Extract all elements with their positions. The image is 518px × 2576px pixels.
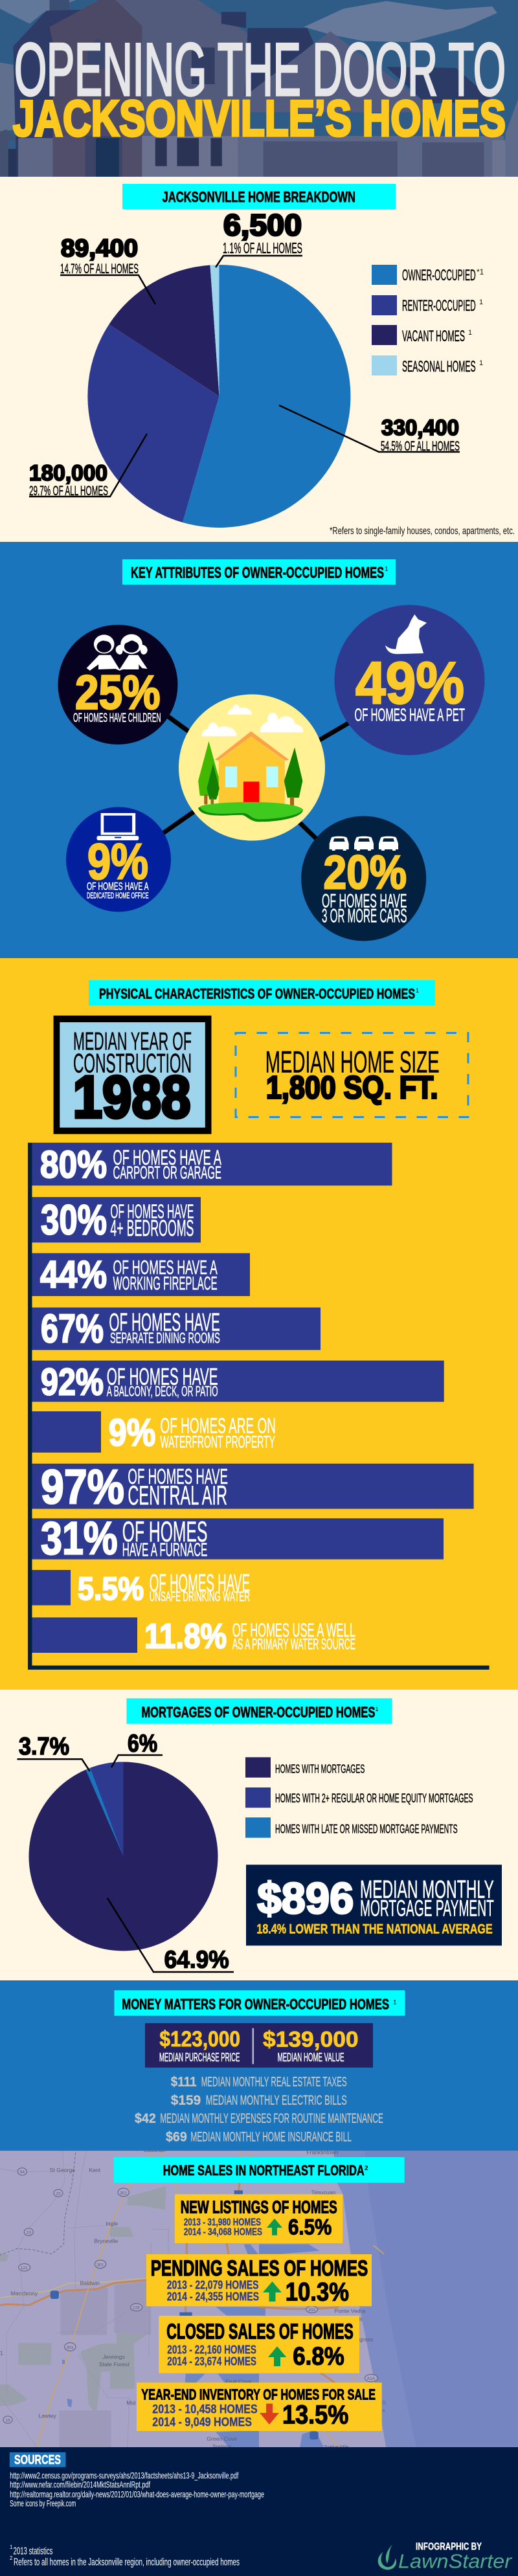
- label: 3.7%: 3.7%: [19, 1733, 69, 1760]
- bar chart: home features: [28, 1143, 490, 1670]
- list: monthly expenses: $69: [166, 2130, 187, 2145]
- label: 6,500 seasonal: 1.1% OF ALL HOMES: [223, 240, 302, 256]
- map background: 16: [5, 2418, 10, 2423]
- callout: median home size: [236, 1033, 468, 1117]
- stat: 20% cars: OF HOMES HAVE: [322, 890, 407, 912]
- bar: 9% waterfront: WATERFRONT PROPERTY: [160, 1432, 275, 1451]
- heading: money matters: MONEY MATTERS FOR OWNER-OCCUPIED HOMES: [122, 1995, 389, 2012]
- label: 6%: [111, 1730, 163, 1767]
- icon: three cars: [330, 836, 398, 851]
- heading: home sales in northeast Florida: [114, 2157, 405, 2183]
- arrow: down: [260, 2404, 279, 2425]
- bar: 30% four bedrooms: [32, 1196, 201, 1244]
- box: closed sales: 6.8%: [293, 2342, 344, 2370]
- map background: grass: [359, 2336, 374, 2343]
- panel: home sales map: [0, 2147, 518, 2450]
- box: pending sales: 10.3%: [286, 2278, 349, 2306]
- bar: 80% carport or garage: OF HOMES HAVE A: [113, 1146, 221, 1169]
- icon: LawnStarter logo: [378, 2544, 396, 2570]
- bar: 5.5% unsafe water: [32, 1570, 250, 1607]
- bar: 92% balcony: OF HOMES HAVE: [107, 1363, 218, 1390]
- legend: home types: 1: [479, 359, 483, 367]
- label: 64.9%: 64.9%: [164, 1946, 229, 1973]
- chart axes: [28, 1143, 490, 1670]
- bar: 44% fireplace: [32, 1253, 250, 1296]
- map background: 1: [0, 2350, 3, 2357]
- map background: 23: [56, 2191, 61, 2196]
- heading: physical characteristics: [89, 980, 435, 1005]
- pie chart: home breakdown: [87, 265, 350, 528]
- box: closed sales: 2013 - 22,160 HOMES: [167, 2344, 256, 2357]
- box: pending sales: 2013 - 22,079 HOMES: [167, 2279, 259, 2292]
- callout: $896 median monthly payment: $896: [257, 1874, 354, 1923]
- bar: 67% dining rooms: SEPARATE DINING ROOMS: [110, 1330, 220, 1347]
- map background: Mid: [126, 2399, 135, 2406]
- heading: home sales in northeast Florida: HOME SALES IN NORTHEAST FLORIDA: [163, 2162, 365, 2178]
- heading: Jacksonville home breakdown: JACKSONVILLE HOME BREAKDOWN: [162, 188, 355, 205]
- label: 180,000 renter-occupied: 180,000: [29, 461, 107, 486]
- panel: median purchase price and home value: MEDIAN HOME VALUE: [278, 2051, 344, 2064]
- credit: infographic by LawnStarter: [378, 2541, 513, 2573]
- map background: Macclenny: [11, 2290, 38, 2297]
- bar: 44% fireplace: OF HOMES HAVE A: [113, 1256, 218, 1279]
- arrow: up: [267, 2219, 282, 2235]
- bar: 44% fireplace: WORKING FIREPLACE: [113, 1273, 218, 1294]
- icon: two children: [87, 634, 148, 671]
- bar: 97% central air: [32, 1460, 474, 1514]
- bar: 31% furnace: [32, 1514, 444, 1565]
- footnotes: [10, 2544, 240, 2568]
- panel: median purchase price and home value: [145, 2023, 373, 2068]
- stat: 20% cars: 3 OR MORE CARS: [322, 905, 407, 926]
- bar: 11.8% well water: [32, 1617, 355, 1656]
- bar: 5.5% unsafe water: 5.5%: [78, 1571, 144, 1607]
- footnotes: 2013 statistics: [13, 2546, 53, 2557]
- stat: 20% cars: 20%: [324, 847, 407, 899]
- map background: 301: [96, 2263, 104, 2267]
- stat: 20% cars: [301, 816, 426, 941]
- map background: Callahan: [144, 2147, 166, 2153]
- header: house photo with title: [0, 0, 518, 177]
- map background: Timucuan: [311, 2189, 336, 2195]
- stat: 9% home office: DEDICATED HOME OFFICE: [87, 891, 149, 900]
- source links: [10, 2470, 264, 2509]
- bar: 11.8% well water: 11.8%: [144, 1617, 227, 1656]
- map background: 121: [21, 2266, 28, 2270]
- bar: 92% balcony: A BALCONY, DECK, OR PATIO: [107, 1383, 218, 1399]
- heading: home sales in northeast Florida: 2: [365, 2165, 368, 2172]
- heading: money matters: 1: [393, 1999, 397, 2006]
- bar: 31% furnace: OF HOMES: [122, 1516, 207, 1548]
- box: year-end inventory: 2014 - 9,049 HOMES: [152, 2415, 252, 2429]
- arrow: up: [268, 2346, 286, 2366]
- panel: mortgages: [0, 1690, 518, 1980]
- map background: Green Cove: [207, 2436, 237, 2442]
- list: monthly expenses: $42: [135, 2111, 156, 2126]
- map background: Franklintown: [306, 2149, 339, 2155]
- map background: s: [383, 2407, 385, 2413]
- pie chart: mortgages: [28, 1762, 218, 1951]
- box: closed sales: CLOSED SALES OF HOMES: [166, 2320, 354, 2344]
- heading: mortgages: [126, 1698, 392, 1724]
- label: 6%: 6%: [128, 1730, 157, 1757]
- bar: 97% central air: 97%: [41, 1460, 124, 1514]
- source links: http://realtormag.realtor.org/daily-news/2012/01/03/what-does-average-home-owner-pay-mortgage: [10, 2489, 264, 2499]
- bar: 80% carport or garage: [32, 1143, 392, 1186]
- label: 3.7%: [17, 1733, 90, 1771]
- bar: 9% waterfront: [32, 1411, 276, 1454]
- bar: 11.8% well water: OF HOMES USE A WELL: [232, 1620, 355, 1641]
- bar: 67% dining rooms: 67%: [41, 1307, 104, 1352]
- bar: 9% waterfront: 9%: [109, 1411, 155, 1454]
- heading: key attributes: [122, 559, 396, 585]
- map background: Baldwin: [80, 2279, 100, 2286]
- stat: 25% children: 25%: [75, 666, 161, 719]
- panel: median purchase price and home value: MEDIAN PURCHASE PRICE: [159, 2051, 240, 2064]
- label: 6,500 seasonal: 6,500: [223, 208, 302, 242]
- panel: sources and credits: [0, 2447, 518, 2576]
- bar: 67% dining rooms: [32, 1307, 321, 1352]
- source links: http://www2.census.gov/programs-surveys/ahs/2013/factsheets/ahs13-9_Jacksonville.pdf: [10, 2470, 238, 2480]
- bar: 92% balcony: [32, 1361, 444, 1404]
- credit: infographic by LawnStarter: LawnStarter: [398, 2550, 513, 2573]
- box: new listings: [175, 2194, 343, 2243]
- icon: dog: [385, 614, 427, 654]
- map background: h: [359, 2316, 363, 2322]
- footnotes: 2: [10, 2555, 13, 2561]
- house photo background: [0, 0, 518, 177]
- heading: mortgages: 1: [376, 1706, 379, 1712]
- map background: St George: [50, 2167, 75, 2173]
- list: monthly expenses: $111: [171, 2075, 197, 2090]
- label: 89,400 vacant: 89,400: [61, 235, 138, 262]
- bar: 67% dining rooms: OF HOMES HAVE: [109, 1309, 220, 1336]
- box: closed sales: [159, 2316, 359, 2373]
- map background: 202: [308, 2308, 315, 2313]
- map background: Bryceville: [94, 2237, 118, 2244]
- map background: 23: [27, 2230, 31, 2235]
- legend: mortgage types: HOMES WITH MORTGAGES: [275, 1762, 365, 1776]
- credit: infographic by LawnStarter: INFOGRAPHIC BY: [416, 2541, 482, 2552]
- map background: Ponte Vedra: [335, 2308, 365, 2314]
- bar: 80% carport or garage: 80%: [40, 1143, 107, 1186]
- label: 180,000 renter-occupied: [29, 434, 147, 498]
- stat: 49% pet: 49%: [355, 650, 464, 716]
- heading: sources: SOURCES: [14, 2453, 61, 2467]
- stat: 25% children: OF HOMES HAVE CHILDREN: [73, 711, 161, 725]
- list: monthly expenses: MEDIAN MONTHLY REAL ESTATE TAXES: [201, 2075, 347, 2090]
- panel: median purchase price and home value: $139,000: [263, 2028, 359, 2052]
- map background: Kent: [89, 2167, 101, 2173]
- panel: key attributes: [0, 542, 518, 958]
- heading: key attributes: KEY ATTRIBUTES OF OWNER-OCCUPIED HOMES: [131, 565, 384, 581]
- footnotes: Refers to all homes in the Jacksonville region, including owner-occupied homes: [14, 2557, 240, 2568]
- stat: 9% home office: OF HOMES HAVE A: [87, 880, 149, 892]
- list: monthly expenses: MEDIAN MONTHLY HOME INSURANCE BILL: [190, 2130, 352, 2145]
- heading: physical characteristics: 1: [416, 987, 419, 994]
- legend: home types: 1: [468, 329, 472, 337]
- callout: median year of construction: CONSTRUCTION: [73, 1048, 192, 1079]
- panel: physical characteristics: [0, 958, 518, 1690]
- map background: Jennings: [102, 2353, 126, 2360]
- bar: 31% furnace: HAVE A FURNACE: [122, 1540, 207, 1561]
- source links: http://www.nefar.com/filebin/2014MktStatsAnnlRpt.pdf: [10, 2480, 150, 2490]
- map background: Twelve Mile: [324, 2444, 348, 2450]
- bar: 5.5% unsafe water: UNSAFE DRINKING WATER: [150, 1589, 250, 1604]
- stat: 49% pet: [334, 605, 484, 755]
- source links: Some icons by Freepik.com: [10, 2498, 76, 2509]
- map background: Fruit Cove: [225, 2378, 251, 2384]
- map background: Springs: [212, 2443, 232, 2450]
- label: 89,400 vacant: 14.7% OF ALL HOMES: [60, 261, 139, 276]
- footnotes: 1: [10, 2544, 13, 2550]
- callout: median year of construction: 1988: [73, 1064, 190, 1130]
- connector lines: [163, 717, 348, 839]
- legend: mortgage types: [245, 1757, 473, 1838]
- box: pending sales: [146, 2254, 372, 2306]
- callout: $896 median monthly payment: [246, 1865, 502, 1945]
- callout: median home size: 1,800 SQ. FT.: [266, 1071, 438, 1106]
- bar chart: home features: OF HOMES HAVE: [150, 1570, 250, 1597]
- callout: median year of construction: MEDIAN YEAR OF: [73, 1028, 192, 1056]
- box: pending sales: PENDING SALES OF HOMES: [151, 2256, 368, 2281]
- heading: money matters: [114, 1990, 405, 2016]
- legend: home types: 1: [479, 298, 483, 306]
- bar: 9% waterfront: OF HOMES ARE ON: [160, 1414, 276, 1437]
- panel: home breakdown: [0, 177, 518, 542]
- map background: Ingle: [106, 2220, 118, 2226]
- heading: mortgages: MORTGAGES OF OWNER-OCCUPIED HOMES: [141, 1703, 375, 1720]
- bar: 30% four bedrooms: 30%: [41, 1196, 107, 1244]
- map background: [0, 2147, 518, 2450]
- map background: A1A: [367, 2377, 376, 2381]
- label: 6,500 seasonal: [216, 208, 302, 267]
- list: monthly expenses: $159: [171, 2093, 201, 2108]
- label: 330,400 owner-occupied: [279, 405, 460, 454]
- box: pending sales: 2014 - 24,355 HOMES: [167, 2290, 259, 2303]
- panel: median purchase price and home value: $123,000: [159, 2027, 240, 2052]
- bar: 80% carport or garage: CARPORT OR GARAGE: [113, 1163, 221, 1183]
- map background: State Forest: [99, 2361, 130, 2368]
- callout: median year of construction: [54, 1016, 211, 1134]
- label: 89,400 vacant: [60, 235, 155, 304]
- heading: key attributes: 1: [385, 566, 388, 573]
- bar: 97% central air: CENTRAL AIR: [128, 1480, 227, 1510]
- map background: 301: [120, 2191, 127, 2195]
- box: year-end inventory: 13.5%: [282, 2399, 348, 2429]
- heading: Jacksonville home breakdown: [122, 184, 396, 209]
- box: new listings: 2014 - 34,068 HOMES: [184, 2227, 262, 2238]
- bar: 11.8% well water: AS A PRIMARY WATER SOURCE: [232, 1636, 355, 1653]
- box: year-end inventory: [137, 2382, 382, 2431]
- icon: laptop: [96, 813, 139, 840]
- box: new listings: 6.5%: [288, 2215, 332, 2240]
- label: 330,400 owner-occupied: 330,400: [381, 416, 459, 440]
- bar: 97% central air: OF HOMES HAVE: [128, 1465, 228, 1489]
- stat: 9% home office: [66, 807, 171, 912]
- bar: 92% balcony: 92%: [41, 1361, 104, 1404]
- box: year-end inventory: 2013 - 10,458 HOMES: [152, 2402, 258, 2416]
- arrow: up: [263, 2281, 282, 2302]
- map background: 94: [20, 2170, 25, 2175]
- box: year-end inventory: YEAR-END INVENTORY OF HOMES FOR SALE: [141, 2386, 376, 2403]
- legend: home types: *1: [477, 267, 484, 276]
- label: 64.9%: [107, 1898, 234, 1973]
- label: 180,000 renter-occupied: 29.7% OF ALL HOMES: [29, 483, 108, 498]
- box: new listings: 2013 - 31,980 HOMES: [184, 2217, 261, 2228]
- panel: money matters: [0, 1980, 518, 2151]
- list: monthly expenses: MEDIAN MONTHLY ELECTRIC BILLS: [206, 2093, 347, 2108]
- map background: 228: [133, 2306, 140, 2311]
- stat: 25% children: [58, 625, 177, 745]
- bar: 30% four bedrooms: 4+ BEDROOMS: [110, 1216, 194, 1241]
- box: new listings: NEW LISTINGS OF HOMES: [181, 2197, 337, 2217]
- bar: 30% four bedrooms: OF HOMES HAVE: [110, 1201, 194, 1223]
- bar: 31% furnace: 31%: [41, 1514, 118, 1565]
- list: monthly expenses: [135, 2075, 383, 2145]
- center house illustration: [179, 694, 325, 840]
- map background: 301: [67, 2346, 74, 2350]
- map background: D: [383, 2399, 386, 2405]
- legend: home types: [372, 265, 484, 375]
- bar: 44% fireplace: 44%: [40, 1253, 107, 1296]
- box: closed sales: 2014 - 23,674 HOMES: [167, 2355, 256, 2368]
- map background: Lawtey: [38, 2412, 56, 2419]
- stat: 9% home office: 9%: [87, 833, 148, 890]
